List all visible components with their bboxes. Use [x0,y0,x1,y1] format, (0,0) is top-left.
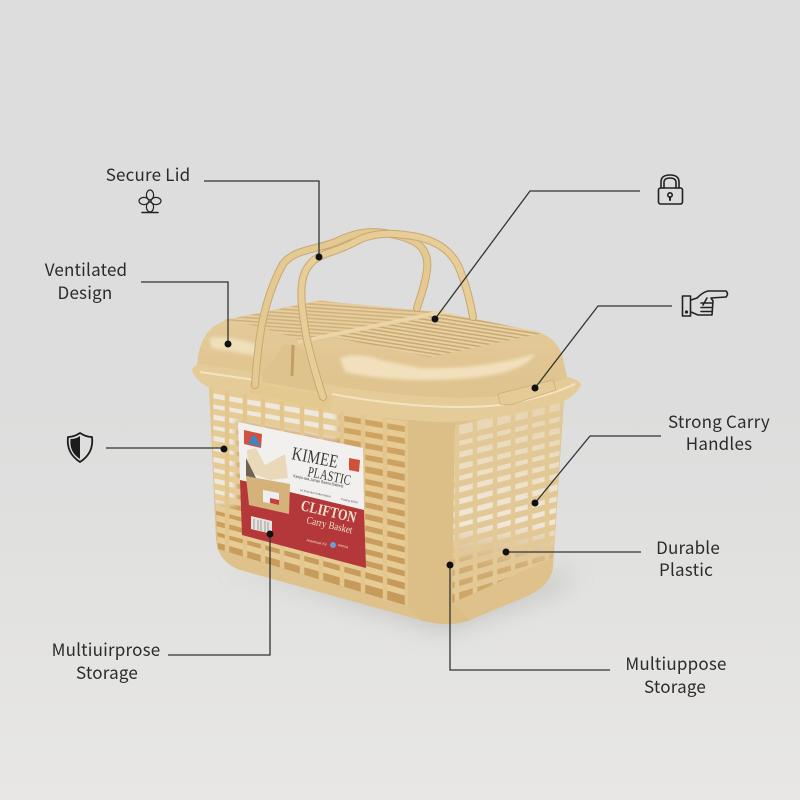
product label: Kenoa [338,543,349,549]
label: strong carry handles: Handles [686,430,752,455]
label product name: CLIFTON [299,498,358,527]
label red area [240,480,366,568]
leader: secure lid [204,181,322,260]
lid dome [197,300,568,405]
label: ventilated design: Design [58,279,112,304]
product label: PLASTIC [306,464,353,488]
label: left multipurpose storage: Storage [76,659,138,684]
leader: strong carry handles [532,436,661,506]
product label: Hi Premium Information [300,488,332,499]
hinge [262,344,318,392]
rim tab [250,382,332,411]
icon: shield [68,433,92,462]
lid highlights [340,354,535,380]
front lattice [205,385,410,610]
label: right multipurpose storage: Storage [644,673,706,698]
label product photo [246,448,290,514]
label: right multipurpose storage: Multiuppose [625,650,727,675]
leader: left multipurpose storage [168,530,274,655]
label logo [244,430,262,448]
label barcode [251,516,272,534]
rim lines [200,372,575,407]
label: secure lid: Secure Lid [106,161,190,186]
back handle [255,232,427,385]
grille: left section [224,301,440,340]
label: durable plastic: Plastic [659,556,713,581]
icon: pointing hand [682,291,728,316]
product label: Carry Basket [305,515,354,537]
corner panel shading [408,418,470,624]
leader: durable plastic [502,548,641,556]
leader: ventilated design [141,282,232,348]
label badge [349,458,360,472]
product label [238,422,366,568]
label brand text: KIMEE [290,443,340,472]
leader: right multipurpose storage [446,562,610,670]
front handle [301,234,473,397]
leader: shield icon [106,446,228,452]
label white area [238,422,364,510]
label bottom text: Jineshwar Kit [306,538,327,547]
label: durable plastic: Durable [656,534,720,559]
product label: Fusing Bl.Kit [341,497,358,505]
basket shadow [225,565,575,632]
product: basket [192,232,581,624]
latch [498,380,556,405]
label: strong carry handles: Strong Carry [668,408,770,433]
right lattice [452,402,563,603]
label small text: Kanpa aaa Jamae Baana Baskets [293,474,344,489]
label: ventilated design: Ventilated [45,256,127,281]
basket body [209,385,564,624]
icon: fan [139,190,161,212]
lid divider [298,311,445,342]
icon: padlock [658,175,682,204]
leader: lock icon [432,191,640,322]
grille: right section [333,313,543,357]
rim [192,364,581,422]
leader: hand icon [532,306,672,392]
label: left multipurpose storage: Multiuirprose [52,636,160,661]
